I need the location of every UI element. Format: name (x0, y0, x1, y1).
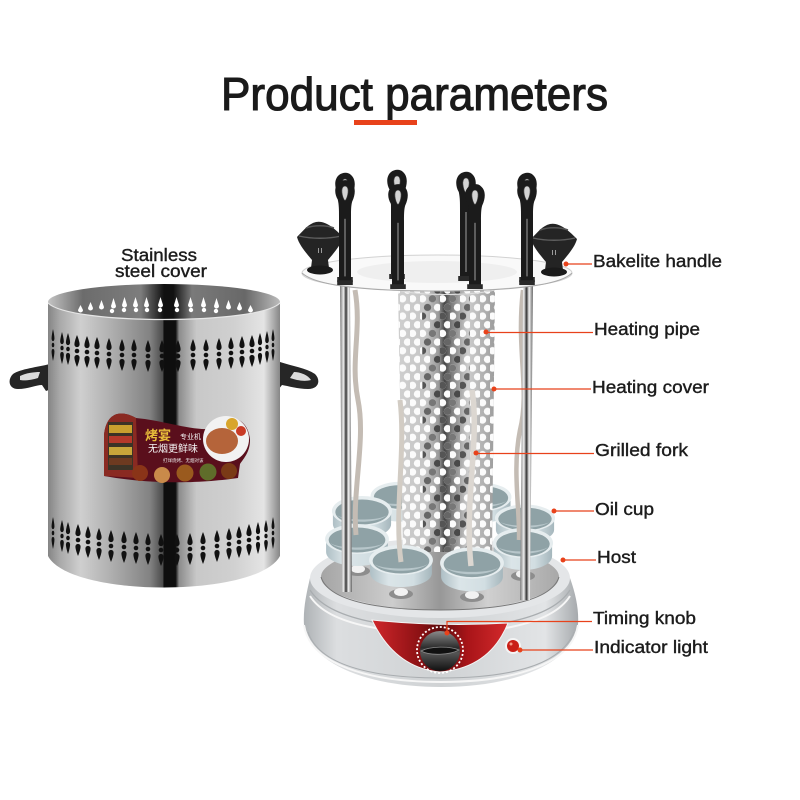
back oil cups (332, 482, 555, 542)
support poles (340, 285, 533, 600)
host base (304, 538, 578, 687)
top plate (302, 255, 572, 291)
indicator light (505, 638, 521, 654)
callout: host (560, 547, 636, 567)
heating pipe tube (398, 290, 495, 552)
skewer grips (335, 170, 537, 289)
cover sticker (104, 413, 250, 483)
cover sticker: 无烟更鲜味 (148, 440, 198, 455)
stainless steel cover label (115, 245, 207, 281)
right cover handle (272, 362, 318, 390)
callout: heating cover (492, 377, 709, 397)
stainless steel cover (10, 284, 318, 588)
front oil cups (325, 524, 553, 591)
stainless steel cover label: Stainless (121, 245, 197, 265)
callout: indicator light (518, 637, 708, 657)
callout: heating pipe: Heating pipe (594, 319, 700, 339)
cover inner wall (48, 284, 280, 320)
tray (321, 544, 559, 610)
grilled forks (355, 290, 524, 566)
left cover handle (10, 362, 54, 391)
callout: timing knob (444, 608, 696, 636)
callout: oil cup (552, 499, 654, 519)
callout: indicator light: Indicator light (594, 637, 708, 657)
upper hole row (52, 329, 274, 372)
cover sticker: 专业机 (180, 432, 201, 442)
title underline (354, 120, 417, 125)
lower hole row (52, 517, 274, 566)
bakelite handles (297, 222, 577, 276)
callout: bakelite handle: Bakelite handle (593, 251, 722, 271)
cover sticker: 打烊烧烤、无烟对该 (163, 457, 204, 464)
inner holes (78, 297, 253, 313)
red control panel (372, 620, 508, 672)
cover body (48, 303, 280, 588)
callout: heating cover: Heating cover (592, 377, 709, 397)
callout: grilled fork: Grilled fork (595, 440, 688, 460)
feet of cups (346, 565, 535, 602)
callout: heating pipe (484, 319, 700, 339)
stainless steel cover label: steel cover (115, 261, 207, 281)
callout: host: Host (597, 547, 636, 567)
timing knob (417, 627, 463, 673)
callout: grilled fork (474, 440, 688, 460)
cover sticker: 烤宴 (145, 425, 171, 444)
title: Product parameters (221, 68, 608, 120)
grill machine (297, 170, 578, 687)
callout: oil cup: Oil cup (595, 499, 654, 519)
callout: timing knob: Timing knob (593, 608, 696, 628)
